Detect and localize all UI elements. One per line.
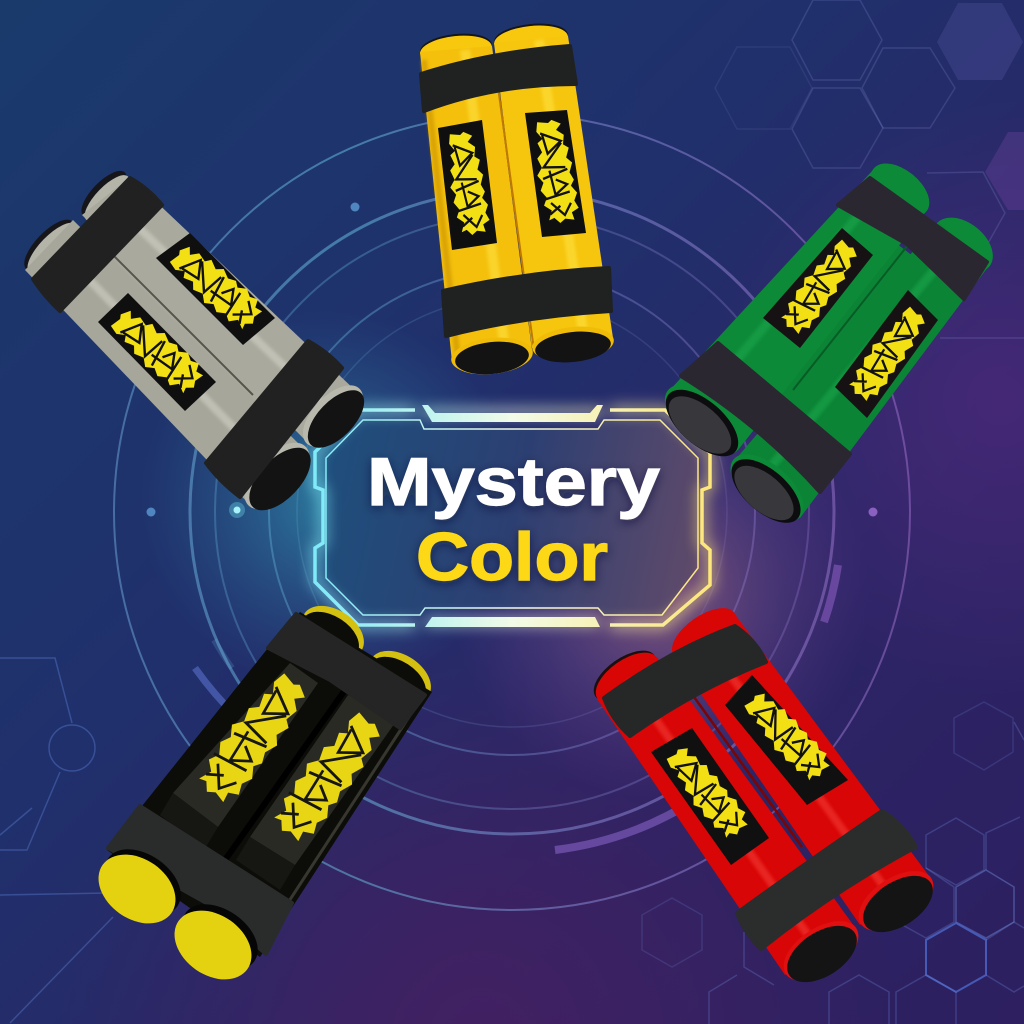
neon frame glow (315, 410, 710, 625)
product: red tubes (585, 598, 944, 994)
product: green tubes (653, 153, 1003, 534)
neon top bar (422, 405, 603, 422)
decorative dots (146, 202, 878, 518)
hexagon pattern: bottom right (642, 702, 1024, 1024)
neon bottom bar (425, 617, 600, 627)
hexagon pattern: top right (715, 0, 1024, 338)
title plate (315, 405, 710, 627)
title text (367, 444, 660, 595)
product: black tubes with yellow caps (85, 595, 440, 994)
hexagon pattern: left (0, 658, 113, 1023)
concentric rings (114, 114, 910, 910)
plate panel (326, 420, 698, 615)
product: gray tubes (17, 164, 374, 521)
neon frame (315, 410, 710, 625)
title text: Mystery (367, 444, 660, 520)
title text: Color (416, 519, 608, 595)
product: yellow tubes (419, 20, 616, 378)
